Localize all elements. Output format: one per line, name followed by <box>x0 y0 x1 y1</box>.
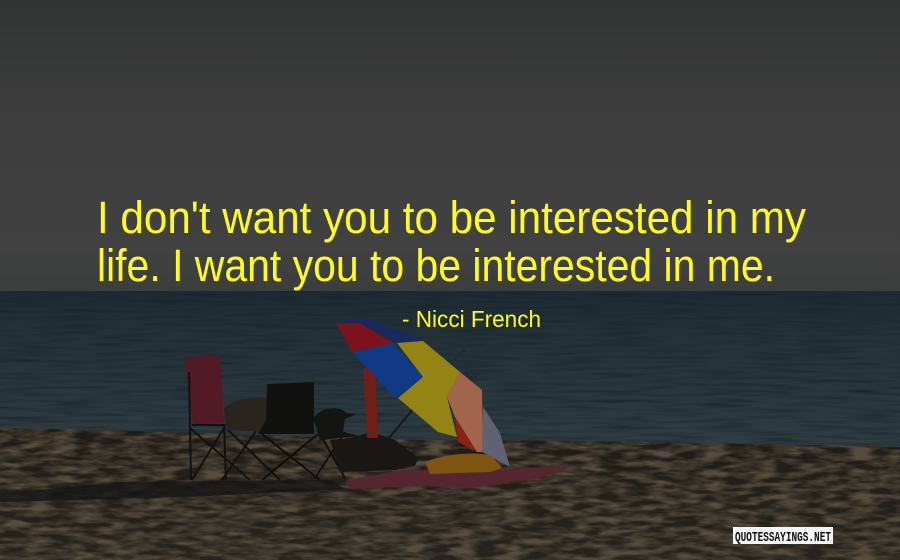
black folding chair <box>258 382 360 480</box>
bags on the sand <box>330 432 418 472</box>
red folding chair <box>184 355 300 480</box>
inflatable float <box>425 454 502 474</box>
background: sea <box>0 291 900 451</box>
beach scene illustration <box>184 319 576 489</box>
red beach towel <box>345 465 576 489</box>
red post <box>363 368 378 438</box>
quote text: I don't want you to be interested in my <box>97 192 806 243</box>
umbrella <box>336 319 510 468</box>
attribution: - Nicci French <box>402 306 541 332</box>
quote text: life. I want you to be interested in me. <box>97 240 775 291</box>
background: beach <box>0 425 900 560</box>
quote poster <box>0 200 900 560</box>
person silhouette <box>224 398 272 432</box>
quote text <box>97 192 806 291</box>
watermark <box>733 527 833 546</box>
watermark: QUOTESSAYINGS.NET <box>735 530 831 546</box>
background: sky <box>0 0 900 292</box>
umbrella panels <box>336 323 393 352</box>
